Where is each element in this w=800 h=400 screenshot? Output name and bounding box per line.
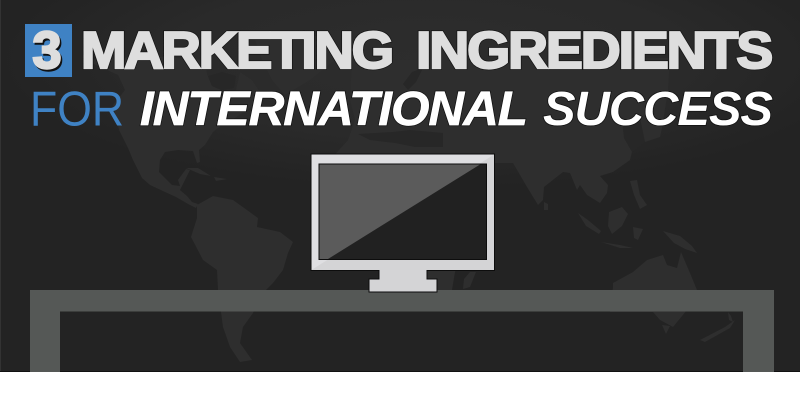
Hudson Bay [208,72,236,90]
screen glare [320,164,480,259]
Caribbean islands [186,168,227,181]
Sea of Japan region [622,118,645,152]
heading: MARKETING INGREDIENTS: INGREDIENTS [416,22,771,80]
screen [319,164,486,260]
heading: MARKETING INGREDIENTS: INGREDIENTS [416,22,771,80]
subheading: INTERNATIONAL SUCCESS: INTERNATIONAL [140,83,527,136]
Baltic Sea [403,68,423,90]
heading: MARKETING INGREDIENTS: MARKETING [81,22,392,80]
monitor [311,154,494,292]
Mediterranean [358,130,443,147]
monitor outline and stand [311,154,494,292]
map seas [208,68,645,152]
North America [85,56,262,208]
world map [85,35,735,362]
subheading: INTERNATIONAL SUCCESS: SUCCESS [543,83,773,136]
frame highlight [312,155,494,270]
number badge: 3 [34,24,63,82]
Tasmania and New Zealand [662,312,735,342]
Australia [610,252,697,327]
title [25,22,773,136]
New Guinea [663,231,697,253]
Eurasia and Africa [320,58,670,290]
subheading: INTERNATIONAL SUCCESS: SUCCESS [543,83,773,136]
desk [30,290,774,372]
heading: MARKETING INGREDIENTS: MARKETING [81,22,392,80]
subheading: FOR: FOR [30,82,124,136]
subheading: INTERNATIONAL SUCCESS: INTERNATIONAL [140,83,527,136]
Madagascar [463,272,476,289]
Sri Lanka and Maritime Southeast Asia [544,180,647,248]
heading: MARKETING INGREDIENTS [81,22,771,80]
number badge: 3 [32,22,62,80]
Greenland [255,35,335,95]
South America [191,196,293,362]
number badge [25,22,72,82]
subheading: INTERNATIONAL SUCCESS [140,83,773,136]
